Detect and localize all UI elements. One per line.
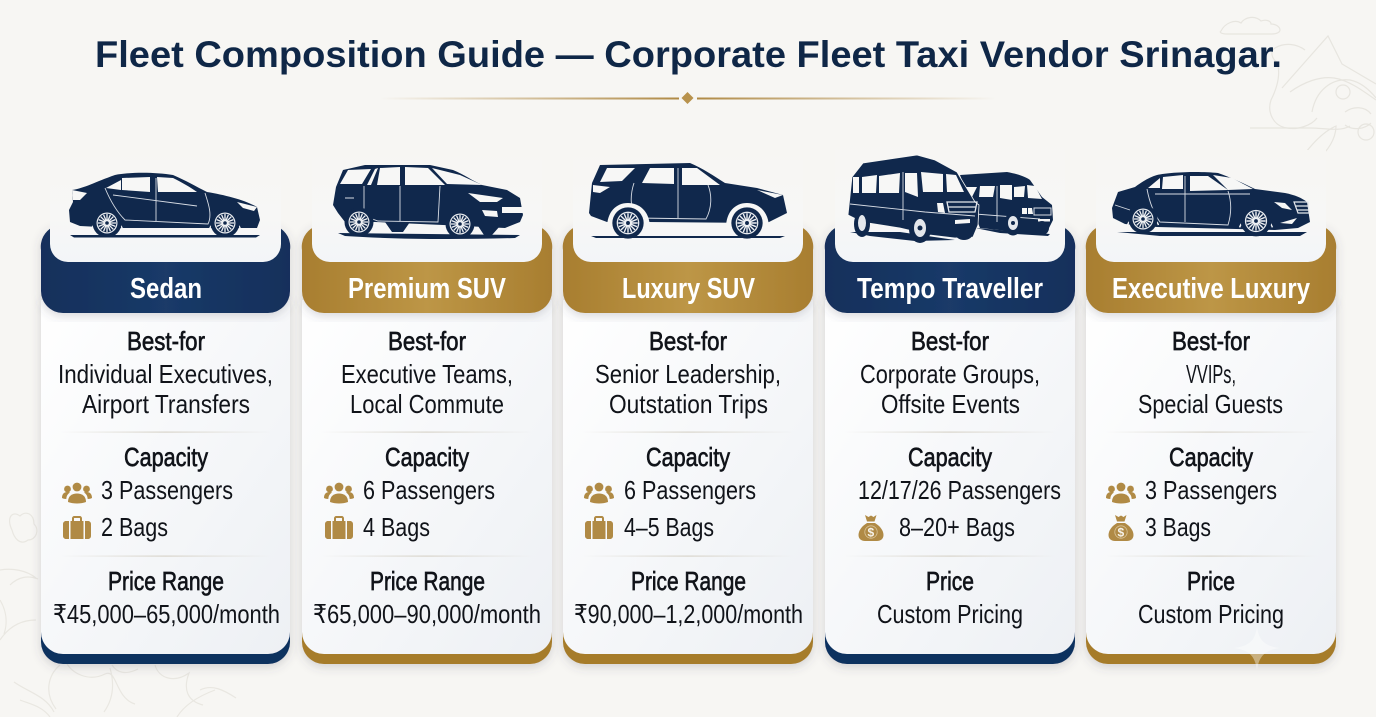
- best-for: Best-for: [1172, 326, 1250, 356]
- icon: passengers: [1106, 483, 1136, 504]
- price: Price: [1187, 566, 1235, 596]
- best-for: Local Commute: [350, 389, 504, 419]
- panel: Premium SUV: [302, 150, 552, 664]
- icon: passengers: [62, 483, 92, 504]
- capacity: 4–5 Bags: [624, 512, 714, 542]
- capacity: 6 Passengers: [624, 475, 756, 505]
- card body: [825, 290, 1075, 664]
- card body: [1086, 290, 1336, 664]
- icon: luggage: [325, 516, 353, 539]
- price: Custom Pricing: [1138, 599, 1284, 629]
- price: [877, 566, 1023, 629]
- price: Price Range: [631, 566, 746, 596]
- icon: executive sedan: [1112, 172, 1310, 236]
- capacity: [324, 442, 495, 542]
- header band: [825, 227, 1075, 313]
- capacity: [62, 442, 233, 542]
- header band: [563, 227, 813, 313]
- decorative ornament: top right peacock: [1220, 17, 1376, 160]
- vehicle name: Sedan: [130, 273, 202, 305]
- icon: sedan car: [69, 173, 260, 238]
- best-for: Airport Transfers: [82, 389, 250, 419]
- icon: tempo travellers: [848, 155, 1053, 243]
- header band: [41, 227, 290, 313]
- vehicle name: Executive Luxury: [1112, 273, 1310, 305]
- best-for: Individual Executives,: [58, 359, 273, 389]
- best-for: Best-for: [911, 326, 989, 356]
- best-for: [341, 326, 513, 419]
- icon: MPV: [333, 165, 523, 239]
- panel: Executive Luxury: [1086, 150, 1336, 664]
- price: ₹45,000–65,000/month: [53, 599, 280, 629]
- best-for: Special Guests: [1138, 389, 1283, 419]
- capacity: Capacity: [1169, 442, 1253, 472]
- best-for: Executive Teams,: [341, 359, 513, 389]
- header band: [302, 227, 552, 313]
- title: Fleet Composition Guide — Corporate Fleet Taxi Vendor Srinagar.: [95, 34, 1282, 75]
- card body: [563, 290, 813, 664]
- vehicle name: Premium SUV: [348, 273, 507, 305]
- image tab: [573, 150, 803, 262]
- price: Price: [926, 566, 974, 596]
- capacity: 3 Passengers: [101, 475, 233, 505]
- image tab: [1096, 150, 1326, 262]
- best-for: [595, 326, 781, 419]
- front van: [848, 155, 979, 243]
- price: Custom Pricing: [877, 599, 1023, 629]
- panel: Tempo Traveller: [825, 140, 1075, 664]
- capacity: 6 Passengers: [363, 475, 495, 505]
- best-for: Best-for: [127, 326, 205, 356]
- price: ₹90,000–1,2,000/month: [574, 599, 803, 629]
- icon: luggage: [585, 516, 613, 539]
- capacity: [584, 442, 756, 542]
- capacity: 4 Bags: [363, 512, 430, 542]
- price: Price Range: [108, 566, 224, 596]
- panel: Sedan: [41, 150, 290, 664]
- image tab: [50, 150, 281, 262]
- header band: [1086, 227, 1336, 313]
- icon: luggage: [63, 516, 91, 539]
- rear van: [960, 172, 1053, 236]
- vehicle name: Luxury SUV: [622, 273, 756, 305]
- icon: money bag luggage: [1108, 515, 1134, 541]
- best-for: Best-for: [649, 326, 727, 356]
- price: ₹65,000–90,000/month: [313, 599, 541, 629]
- capacity: 12/17/26 Passengers: [858, 475, 1061, 505]
- title divider with diamond: [380, 92, 996, 104]
- capacity: 8–20+ Bags: [899, 512, 1015, 542]
- best-for: [1138, 326, 1283, 419]
- icon: passengers: [324, 483, 354, 504]
- capacity: 2 Bags: [101, 512, 168, 542]
- price: Price Range: [370, 566, 485, 596]
- price: [53, 566, 280, 629]
- panel: Luxury SUV: [563, 150, 813, 664]
- icon: passengers: [584, 483, 614, 504]
- capacity: Capacity: [124, 442, 208, 472]
- capacity: 3 Passengers: [1145, 475, 1277, 505]
- image tab: [312, 150, 542, 262]
- price: [313, 566, 541, 629]
- vehicle name: Tempo Traveller: [857, 273, 1043, 305]
- best-for: Outstation Trips: [609, 389, 768, 419]
- best-for: Best-for: [388, 326, 466, 356]
- capacity: Capacity: [908, 442, 992, 472]
- capacity: [1106, 442, 1277, 542]
- price: [1138, 566, 1284, 629]
- icon: large SUV: [589, 163, 787, 239]
- capacity: 3 Bags: [1145, 512, 1211, 542]
- best-for: Corporate Groups,: [860, 359, 1040, 389]
- icon: money bag luggage: [858, 515, 884, 541]
- capacity: Capacity: [646, 442, 730, 472]
- price: [574, 566, 803, 629]
- best-for: VVIPs,: [1186, 359, 1236, 389]
- image tab: [835, 140, 1065, 262]
- card body: [302, 290, 552, 664]
- capacity: [858, 442, 1061, 542]
- capacity: Capacity: [385, 442, 469, 472]
- best-for: Offsite Events: [881, 389, 1020, 419]
- best-for: [58, 326, 273, 419]
- card body: [41, 290, 290, 664]
- decorative ornament: bottom left floral: [0, 513, 236, 717]
- best-for: Senior Leadership,: [595, 359, 781, 389]
- best-for: [860, 326, 1040, 419]
- sparkle: [1234, 627, 1280, 670]
